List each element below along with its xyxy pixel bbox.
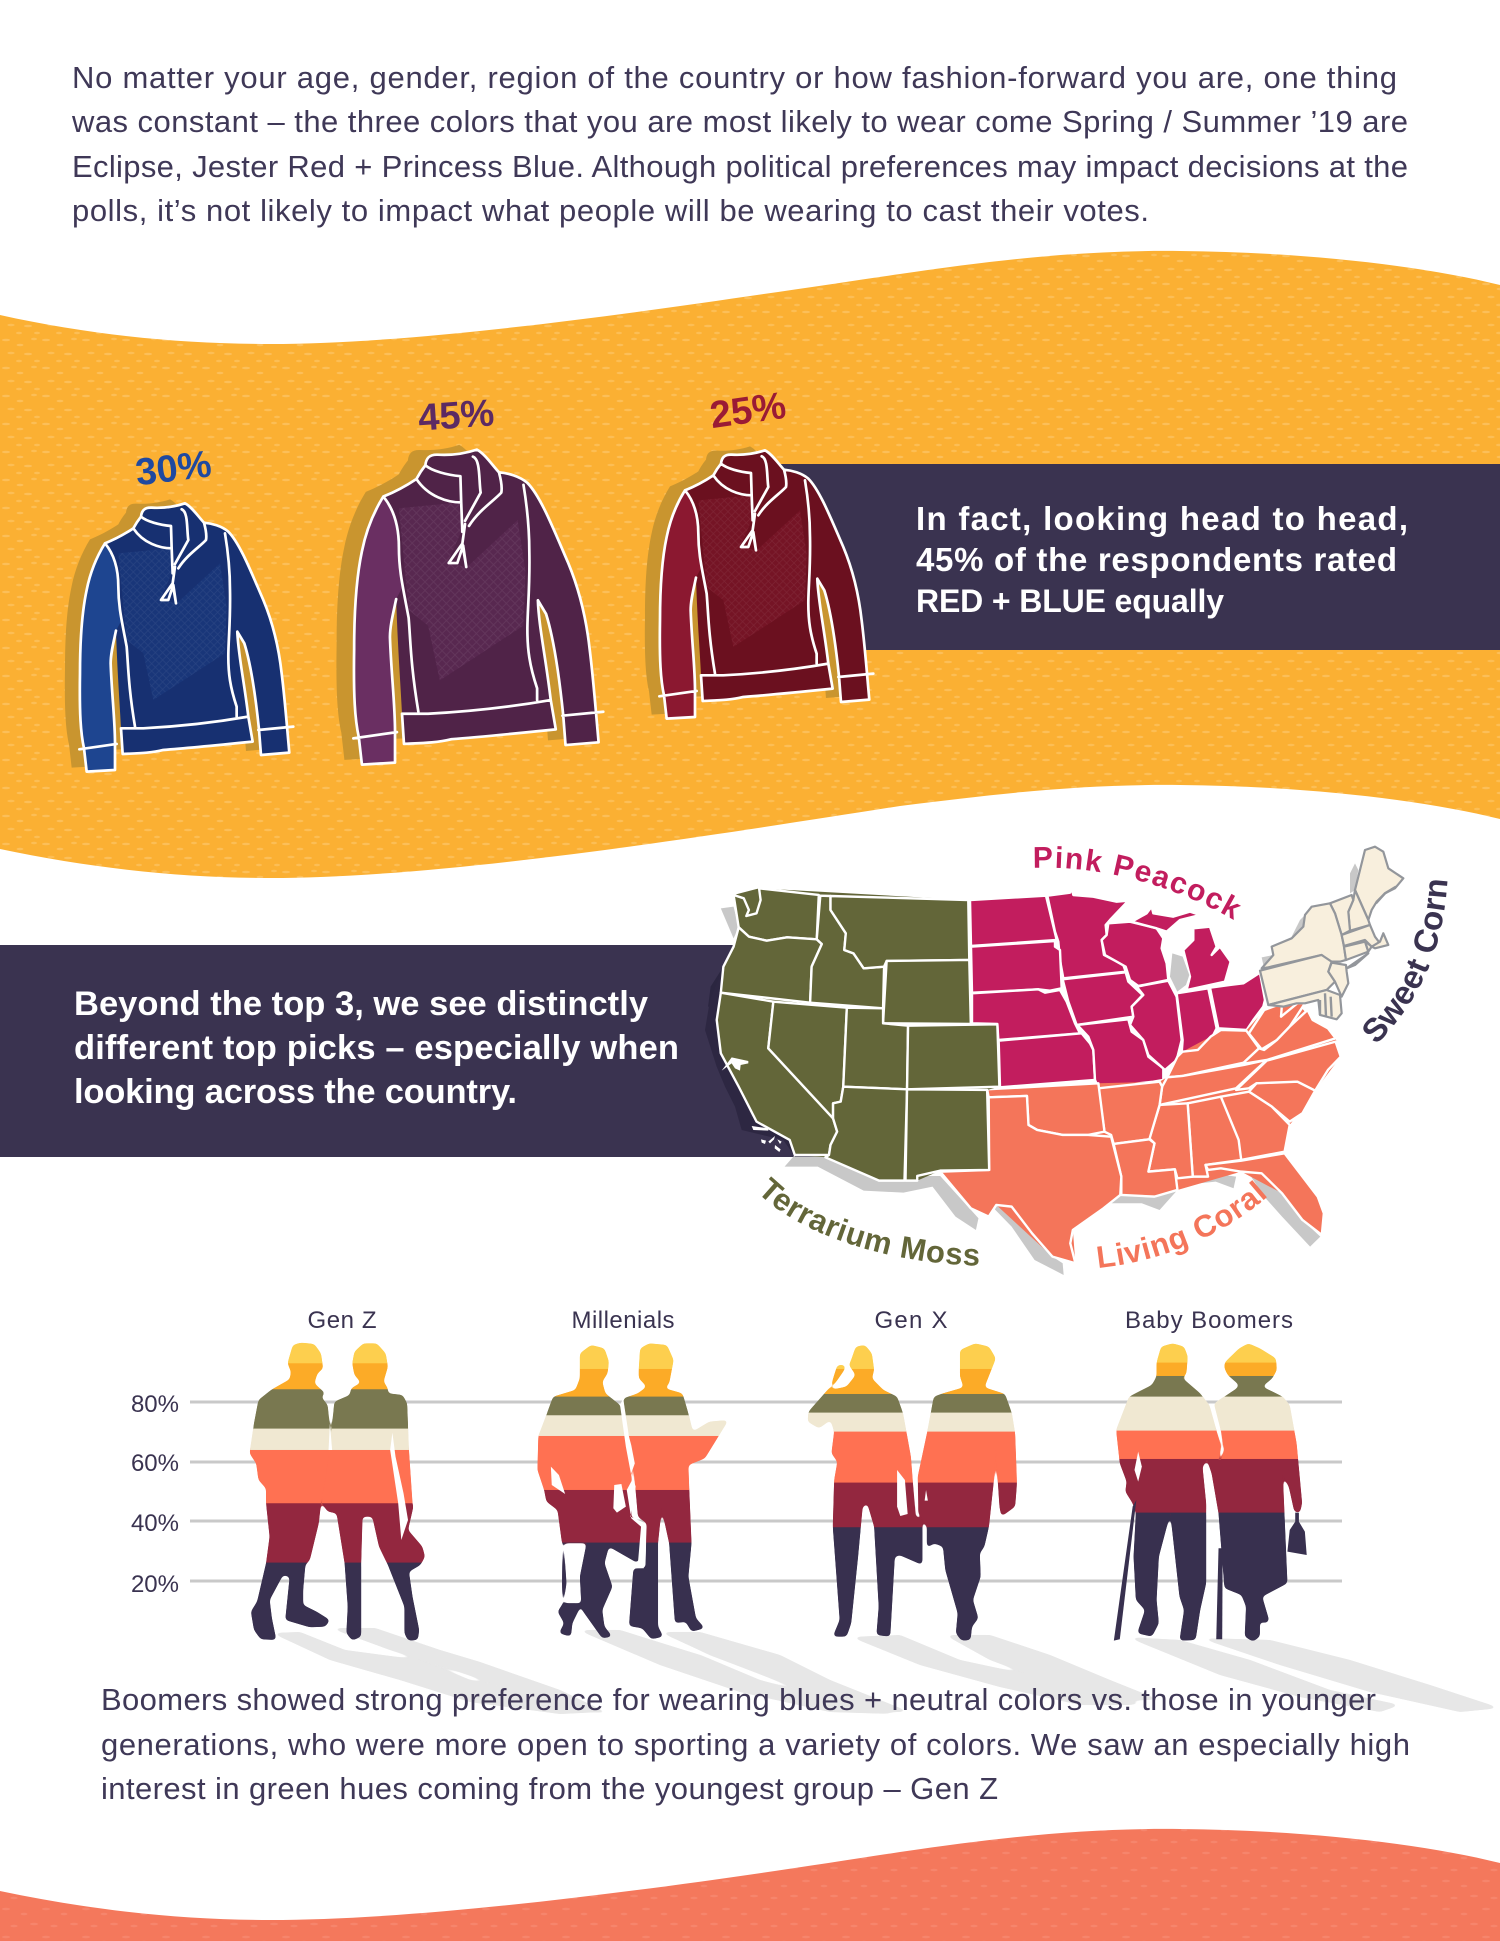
chart axis labels: 20% [131, 1571, 179, 1598]
region: Terrarium Moss states [717, 888, 999, 1181]
region: Sweet Corn states [1260, 847, 1403, 1019]
figures: Gen X [808, 1344, 1017, 1640]
callout: head to head [780, 464, 1500, 650]
generation labels: Millenials [572, 1307, 674, 1334]
intro paragraph: No matter your age, gender, region of the country or how fashion-forward you are, one thing [72, 60, 1397, 95]
region: Living Coral states [940, 1003, 1341, 1263]
generation labels: Baby Boomers [1125, 1307, 1293, 1334]
chart gridlines [190, 1402, 1342, 1581]
figures: Gen Z [250, 1342, 424, 1640]
callout: head to head: RED + BLUE equally [916, 583, 1224, 619]
chart axis labels: 40% [131, 1510, 179, 1537]
US map [705, 847, 1403, 1275]
bottom paragraph [101, 1682, 1410, 1806]
figure shadows [272, 1628, 1500, 1714]
map label: Pink Peacock: Pink Peacock [1034, 846, 1241, 920]
chart axis labels: 80% [131, 1391, 179, 1418]
sweater: blue 30%: 30% [133, 443, 214, 494]
coral wave footer [0, 1829, 1500, 1941]
sweater: blue 30% [65, 443, 293, 772]
sweater: red 25% [645, 385, 873, 719]
map label: Living Coral: Living Coral [1097, 1180, 1267, 1268]
callout: beyond the top 3: different top picks – especially when [74, 1029, 679, 1067]
map label: Terrarium Moss: Terrarium Moss [762, 1176, 979, 1266]
intro paragraph: Eclipse, Jester Red + Princess Blue. Although political preferences may impact decisions at the [72, 149, 1408, 184]
sweater: purple 45%: 45% [417, 392, 496, 440]
chart axis labels: 60% [131, 1450, 179, 1477]
chart axis labels [131, 1391, 179, 1598]
sweater: red 25%: 25% [707, 385, 789, 437]
sweater: purple 45% [336, 392, 603, 765]
intro paragraph: was constant – the three colors that you are most likely to wear come Spring / Summer ’19 are [71, 104, 1408, 139]
callout: beyond the top 3 [0, 945, 795, 1157]
callout: head to head: In fact, looking head to head, [916, 500, 1408, 537]
intro paragraph [71, 60, 1408, 228]
bottom paragraph: interest in green hues coming from the youngest group – Gen Z [101, 1771, 998, 1806]
callout: beyond the top 3: Beyond the top 3, we see distinctly [74, 985, 648, 1023]
region: Pink Peacock states [970, 888, 1265, 1088]
map shadows [708, 907, 1320, 1275]
bottom paragraph: Boomers showed strong preference for wearing blues + neutral colors vs. those in younger [101, 1682, 1376, 1717]
bay and channel islands [722, 1057, 782, 1152]
figures: Baby Boomers [1106, 1337, 1313, 1646]
generation labels: Gen X [874, 1307, 948, 1334]
cane and handbag [1114, 1452, 1307, 1641]
map label: Sweet Corn: Sweet Corn [1363, 880, 1448, 1042]
generation labels: Gen Z [308, 1307, 376, 1334]
generation labels [308, 1307, 1293, 1334]
intro paragraph: polls, it’s not likely to impact what people will be wearing to cast their votes. [72, 193, 1149, 228]
orange wave band [0, 251, 1500, 878]
bottom paragraph: generations, who were more open to sporting a variety of colors. We saw an especially high [101, 1727, 1410, 1762]
callout: head to head: 45% of the respondents rated [916, 541, 1397, 578]
figures: Millenials [538, 1344, 726, 1639]
callout: beyond the top 3: looking across the country. [74, 1073, 517, 1111]
